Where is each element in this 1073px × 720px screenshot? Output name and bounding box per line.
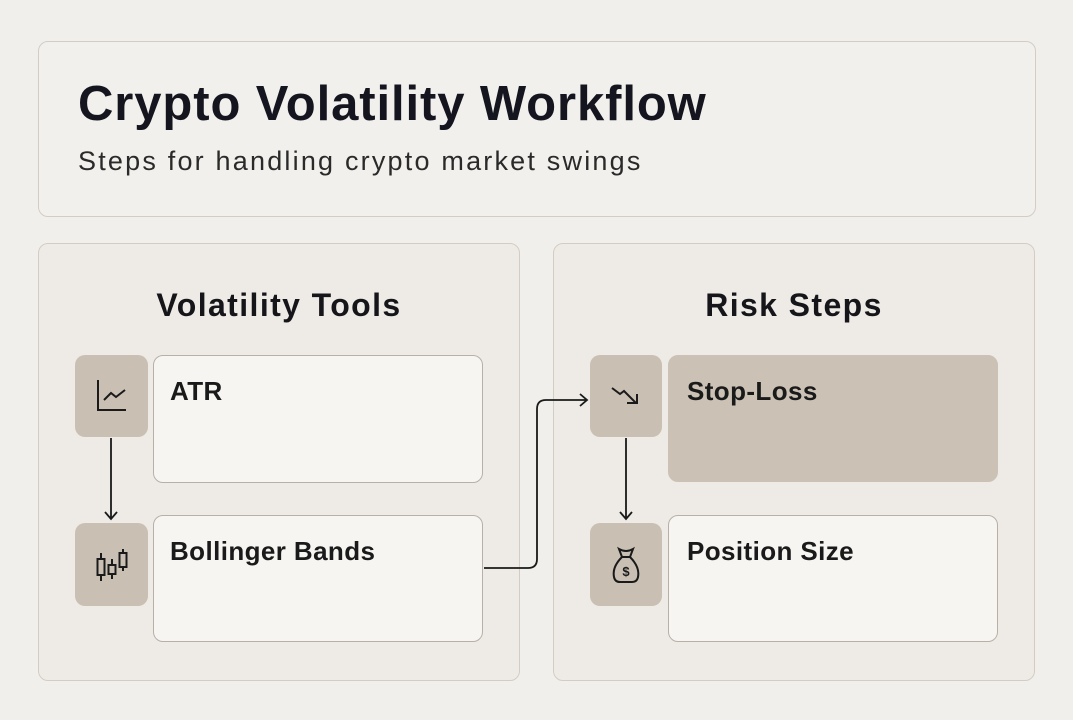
card: Stop-Loss: Stop-Loss bbox=[687, 376, 818, 406]
header panel bbox=[38, 41, 1036, 217]
heading: volatility tools: Volatility Tools bbox=[156, 287, 402, 323]
card: ATR bbox=[153, 355, 483, 483]
card: Position Size: Position Size bbox=[687, 536, 854, 566]
card: ATR: ATR bbox=[170, 376, 223, 406]
card: Bollinger Bands bbox=[153, 515, 483, 642]
subtitle: Steps for handling crypto market swings bbox=[78, 146, 643, 176]
icon: candlesticks bbox=[75, 523, 148, 606]
heading: risk steps: Risk Steps bbox=[705, 287, 883, 323]
icon: line chart bbox=[75, 355, 148, 437]
card: Stop-Loss bbox=[668, 355, 998, 482]
panel: risk steps bbox=[553, 243, 1035, 681]
icon: money bag: $ bbox=[622, 564, 630, 578]
card: Bollinger Bands: Bollinger Bands bbox=[170, 536, 375, 566]
icon: money bag bbox=[590, 523, 662, 606]
icon: downtrend bbox=[590, 355, 662, 437]
panel: volatility tools bbox=[38, 243, 520, 681]
title: Crypto Volatility Workflow bbox=[78, 77, 707, 131]
card: Position Size bbox=[668, 515, 998, 642]
